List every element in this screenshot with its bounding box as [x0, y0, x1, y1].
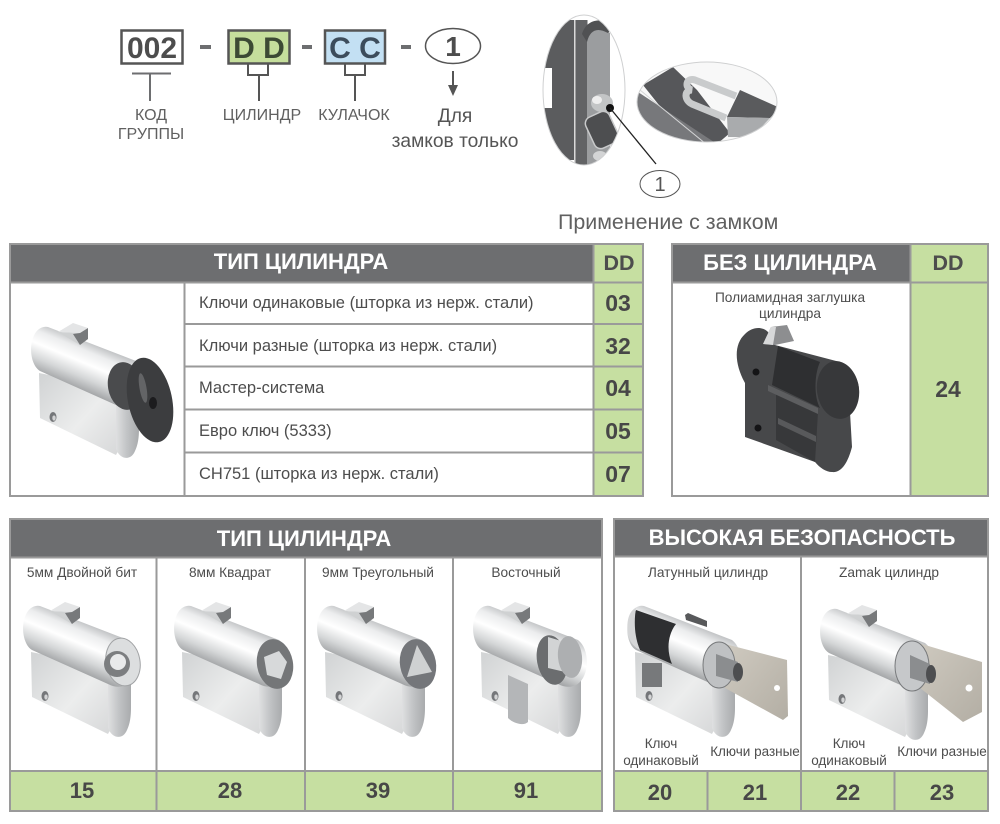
oval outline [637, 62, 777, 142]
code column: 04 [605, 375, 631, 401]
code column: 24 [935, 376, 961, 402]
cam code box CC: C C [329, 32, 381, 65]
cylinder code box DD: D D [233, 32, 285, 65]
column: brass cylinder: одинаковый [623, 753, 699, 768]
code column: DD [932, 251, 964, 275]
heading [11, 245, 593, 282]
label: group code: КОД [135, 107, 167, 124]
option rows [199, 294, 534, 483]
column: zamak cylinder: Ключ [833, 736, 865, 751]
description: Полиамидная заглушка [715, 290, 865, 305]
column: brass cylinder: Латунный цилиндр [648, 565, 769, 580]
code column: 05 [605, 418, 631, 444]
photo: left detail oval [544, 20, 618, 164]
column: oriental: Восточный [491, 565, 561, 580]
heading [673, 245, 910, 282]
lock option oval 1: 1 [445, 31, 461, 62]
caption: Применение с замком [558, 210, 778, 234]
callout oval 1 [640, 170, 680, 198]
option rows: Мастер-система [199, 379, 325, 397]
lock option oval 1 [426, 28, 480, 64]
column: brass cylinder: Ключи разные [710, 744, 800, 759]
heading [615, 520, 987, 556]
column: zamak cylinder: Zamak цилиндр [839, 565, 939, 580]
column: oriental [473, 565, 587, 803]
column: brass cylinder: 20 [648, 780, 672, 805]
label: cam: КУЛАЧОК [318, 107, 390, 124]
column: 9mm triangle [317, 565, 440, 803]
column: brass cylinder [623, 565, 800, 805]
option rows: Ключи одинаковые (шторка из нерж. стали) [199, 294, 534, 312]
column: zamak cylinder [811, 565, 987, 805]
code column: 32 [605, 333, 631, 359]
column: 8mm square: 28 [218, 778, 242, 803]
label: cylinder: ЦИЛИНДР [223, 107, 301, 124]
callout oval 1: 1 [654, 174, 666, 196]
panel: cylinder type table [10, 243, 643, 496]
column: zamak cylinder: 23 [930, 780, 954, 805]
dash [200, 45, 211, 49]
code column [910, 243, 988, 496]
code strip [615, 771, 987, 810]
column: 9mm triangle: 39 [366, 778, 390, 803]
column: brass cylinder: 21 [743, 780, 767, 805]
panel: high security [613, 519, 989, 811]
photo: right detail oval [638, 67, 776, 142]
heading: БЕЗ ЦИЛИНДРА [703, 250, 877, 275]
column: oriental: 91 [514, 778, 538, 803]
panel: cylinder type with drive profiles [9, 519, 603, 811]
code column [594, 243, 643, 496]
column: zamak cylinder: 22 [836, 780, 860, 805]
part number code diagram [118, 28, 518, 152]
code strip [11, 771, 601, 810]
arrow down [448, 71, 458, 96]
heading [11, 520, 601, 557]
option rows: Евро ключ (5333) [199, 422, 332, 440]
label: locks only: Для [438, 106, 472, 127]
column: 5mm double bit: 5мм Двойной бит [27, 565, 138, 580]
column: 8mm square: 8мм Квадрат [189, 565, 272, 580]
lock application illustration [540, 10, 780, 234]
column: zamak cylinder: Ключи разные [897, 744, 987, 759]
heading: ТИП ЦИЛИНДРА [214, 249, 388, 274]
code column: 03 [605, 290, 631, 316]
column: brass cylinder: Ключ [645, 736, 677, 751]
oval outline [543, 15, 625, 165]
option rows: Ключи разные (шторка из нерж. стали) [199, 337, 497, 355]
connector: group code [132, 73, 171, 101]
image: cylinder with black key cap [31, 323, 180, 458]
option rows: CH751 (шторка из нерж. стали) [199, 465, 439, 483]
connector: cam [345, 64, 365, 101]
column: zamak cylinder: одинаковый [811, 753, 887, 768]
callout pointer [606, 104, 656, 164]
code column: 07 [605, 461, 631, 487]
connector: cylinder [248, 64, 268, 101]
dash [401, 45, 411, 49]
column: 5mm double bit: 15 [70, 778, 94, 803]
dash [302, 45, 312, 49]
heading: ТИП ЦИЛИНДРА [217, 526, 391, 551]
panel: no cylinder [672, 243, 988, 496]
column: 9mm triangle: 9мм Треугольный [322, 565, 434, 580]
code column: DD [603, 251, 635, 275]
label: group code: ГРУППЫ [118, 126, 184, 143]
heading: ВЫСОКАЯ БЕЗОПАСНОСТЬ [649, 525, 956, 550]
description: цилиндра [759, 306, 821, 321]
image: black polyamide plug [737, 325, 863, 472]
column: 5mm double bit [23, 565, 144, 803]
column: 8mm square [174, 565, 297, 803]
group code box 002: 002 [127, 32, 177, 65]
label: locks only: замков только [392, 131, 518, 152]
